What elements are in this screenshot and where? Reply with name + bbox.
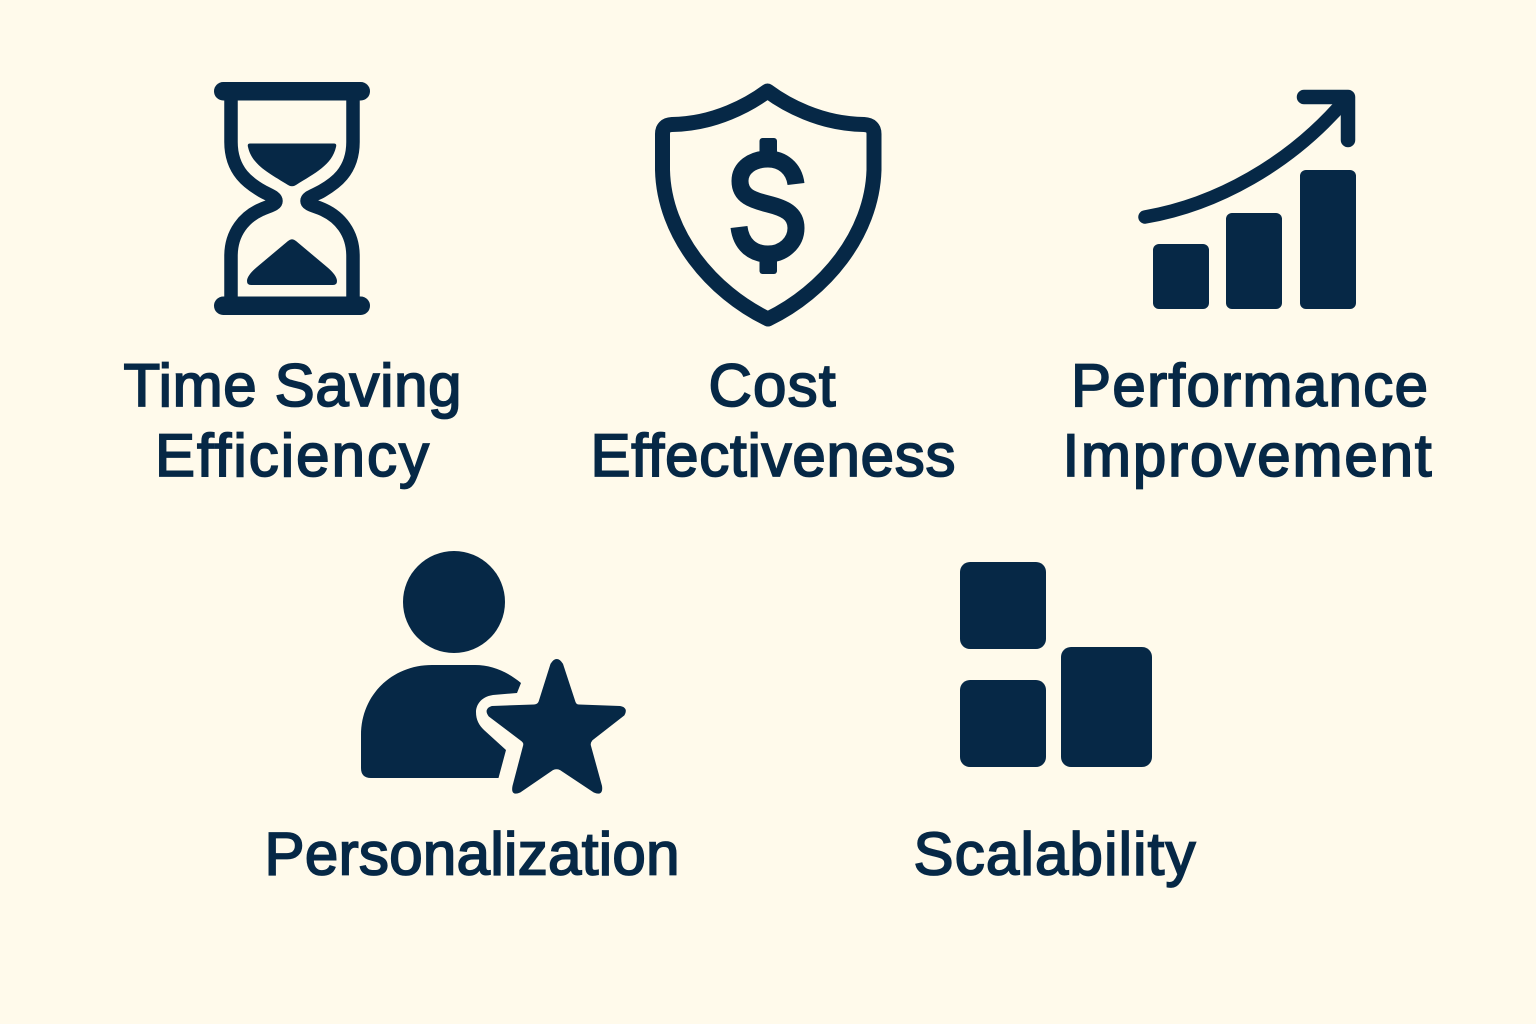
label: Performance Improvement: Improvement [1062, 422, 1432, 489]
icon: growth bar chart with arrow [1145, 97, 1356, 309]
icon: hourglass [214, 82, 370, 315]
label: Time Saving Efficiency: Time Saving [124, 352, 462, 419]
label: Performance Improvement: Performance [1071, 352, 1428, 419]
label: Performance Improvement [1062, 352, 1432, 489]
icon: person with star [361, 551, 625, 793]
label: Cost Effectiveness: Cost [708, 352, 836, 419]
label: Personalization: Personalization [264, 820, 680, 888]
label: Time Saving Efficiency [124, 352, 462, 489]
icon: shield with dollar sign [662, 91, 874, 319]
label: Cost Effectiveness: Effectiveness [590, 422, 956, 489]
label: Cost Effectiveness [590, 352, 956, 489]
icon: scalability blocks [960, 562, 1152, 767]
label: Scalability: Scalability [914, 820, 1196, 888]
label: Time Saving Efficiency: Efficiency [155, 422, 429, 489]
